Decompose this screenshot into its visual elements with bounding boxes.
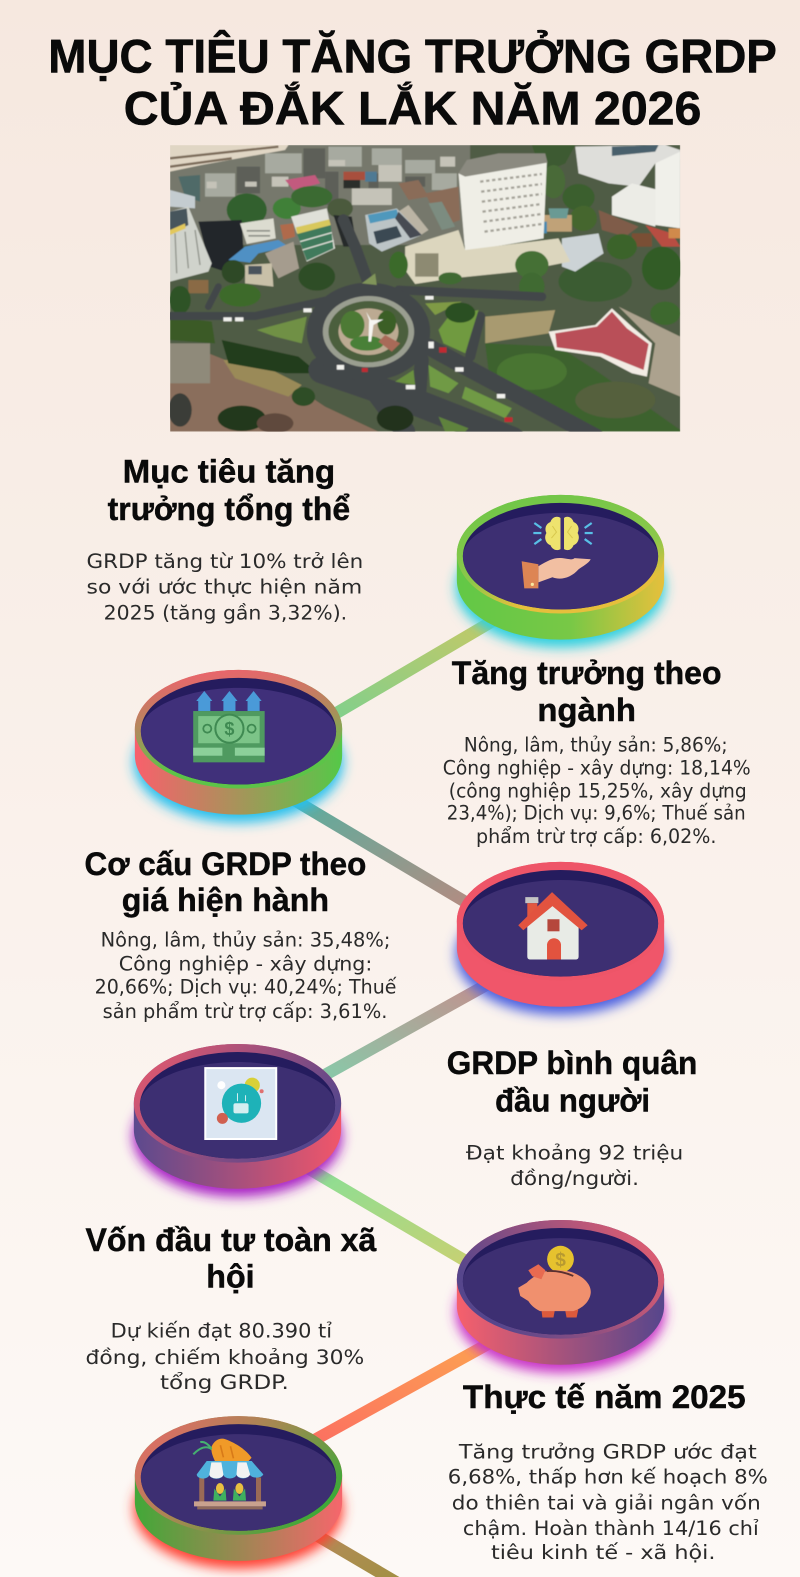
icon: framed globe picture [204,1067,277,1140]
panel: disc with house icon [456,862,665,1015]
panel: actual 2025 text: Thực tế năm 2025 [463,1379,746,1415]
panel: actual 2025 text: chậm. Hoàn thành 14/16 chỉ [463,1517,759,1540]
title [48,28,777,136]
panel: disc with brain and hand icon [456,495,665,648]
panel: overall growth target text: trưởng tổng thể [108,491,350,527]
panel: sector growth text: phẩm trừ trợ cấp: 6,02%. [476,825,716,848]
panel: sector growth text: Công nghiệp - xây dựng: 18,14% [443,756,751,779]
panel: actual 2025 text: 6,68%, thấp hơn kế hoạch 8% [448,1465,768,1488]
panel: per-capita GRDP text: Đạt khoảng 92 triệu [466,1142,683,1165]
icon: piggy bank with coin [518,1246,591,1318]
panel: sector growth text: Tăng trưởng theo [452,655,722,691]
panel: per-capita GRDP text: GRDP bình quân [447,1045,697,1081]
panel: GRDP structure text: 20,66%; Dịch vụ: 40,24%; Thuế [95,976,397,999]
panel: overall growth target text: so với ước thực hiện năm [87,575,362,598]
title: MỤC TIÊU TĂNG TRƯỞNG GRDP [48,28,777,83]
panel: GRDP structure text: Cơ cấu GRDP theo [85,846,366,882]
panel: per-capita GRDP text: đồng/người. [510,1167,639,1190]
icon: money with arrows: $ [224,719,234,739]
panel: GRDP structure text: giá hiện hành [122,882,329,918]
panel: social investment text [86,1222,376,1394]
panel: social investment text: hội [206,1258,255,1294]
title: CỦA ĐẮK LẮK NĂM 2026 [124,81,701,136]
panel: sector growth text: (công nghiệp 15,25%, xây dựng [449,780,747,803]
panel: social investment text: Vốn đầu tư toàn xã [86,1222,376,1258]
panel: disc with picture icon [133,1044,342,1197]
icon: market stall with carrot [193,1439,266,1509]
panel: overall growth target text: GRDP tăng từ 10% trở lên [87,550,363,573]
connector lines between discs [282,615,503,1577]
icon: money with arrows [193,691,265,762]
panel: actual 2025 text: Tăng trưởng GRDP ước đạt [458,1440,757,1463]
panel: sector growth text: ngành [537,692,636,728]
icon: brain in hand [522,517,593,588]
panel: disc with market stall icon [134,1416,343,1569]
panel: GRDP structure text: Công nghiệp - xây dựng: [119,953,372,976]
panel: actual 2025 text [448,1379,768,1564]
panel: overall growth target text [87,454,363,625]
panel: overall growth target text: Mục tiêu tăng [123,454,335,490]
panel: GRDP structure text [85,846,397,1023]
panel: actual 2025 text: tiêu kinh tế - xã hội. [491,1541,715,1564]
panel: disc with piggy bank icon [456,1220,665,1373]
panel: social investment text: Dự kiến đạt 80.390 tỉ [111,1320,332,1343]
panel: sector growth text: Nông, lâm, thủy sản: 5,86%; [464,733,728,756]
panel: GRDP structure text: Nông, lâm, thủy sản: 35,48%; [101,928,390,951]
panel: social investment text: đồng, chiếm khoảng 30% [86,1346,364,1369]
panel: social investment text: tổng GRDP. [160,1371,289,1394]
icon: piggy bank with coin: $ [555,1250,566,1271]
icon: house [518,892,588,959]
panel: per-capita GRDP text: đầu người [495,1082,650,1118]
panel: sector growth text: 23,4%); Dịch vụ: 9,6%; Thuế sản [447,802,746,825]
panel: GRDP structure text: sản phẩm trừ trợ cấp: 3,61%. [103,1000,387,1023]
aerial photo of the roundabout [168,145,682,440]
panel: disc with money icon [134,670,343,823]
panel: sector growth text [443,655,751,848]
panel: overall growth target text: 2025 (tăng gần 3,32%). [104,602,347,625]
panel: per-capita GRDP text [447,1045,697,1190]
panel: actual 2025 text: do thiên tai và giải ngân vốn [452,1492,761,1515]
